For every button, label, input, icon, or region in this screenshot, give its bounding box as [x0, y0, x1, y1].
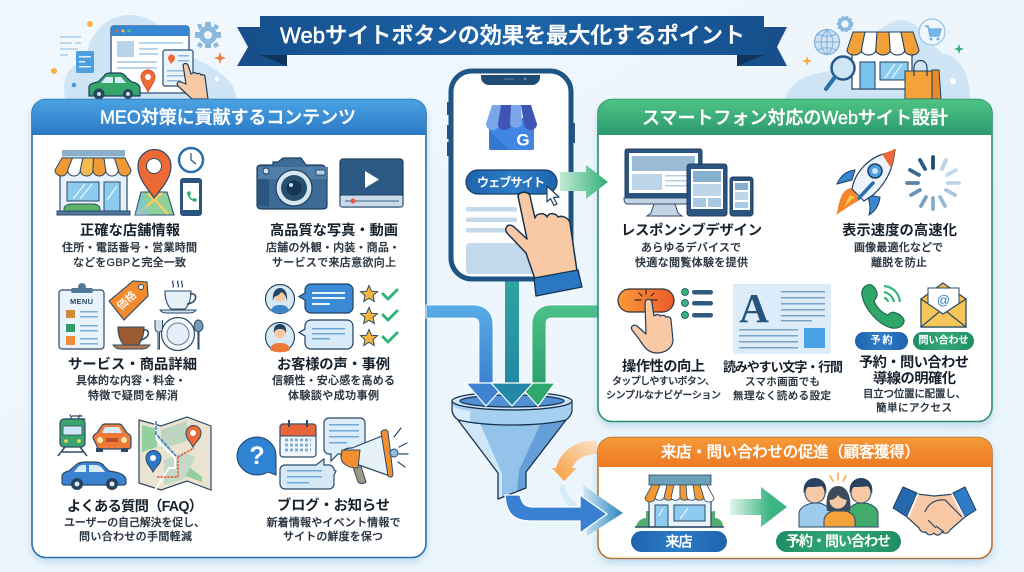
panel header: smartphone website design: スマートフォン対応のWebサイト設計	[642, 108, 948, 128]
item: service and product details: サービス・商品詳細	[68, 355, 197, 373]
icon: phone, mail, buttons	[855, 283, 974, 350]
item: high quality photo and video: 高品質な写真・動画	[270, 221, 398, 239]
icon: happy customers	[799, 473, 878, 527]
item: usability: タップしやすいボタン、	[612, 376, 715, 388]
item: responsive design: 快適な閲覧体験を提供	[635, 255, 748, 269]
item: page speed	[836, 149, 959, 269]
item: clear reservation and contact path	[855, 283, 974, 414]
icon: store, pin, clock, phone	[55, 148, 203, 216]
item: responsive design: あらゆるデバイスで	[641, 240, 741, 254]
panel header: visit and inquiry promotion	[598, 438, 992, 467]
arrow: from phone to funnel	[491, 281, 533, 406]
item: readable text: 無理なく読める設定	[733, 389, 832, 402]
icon: phone, mail, buttons: 問い合わせ	[918, 334, 968, 346]
illustration: web page, car, map pin and hand	[51, 15, 236, 99]
icon: readable document: A	[739, 285, 769, 331]
icon: reviews, stars and check marks	[266, 284, 397, 352]
arrow: from smartphone panel to funnel	[517, 305, 598, 406]
item: responsive design	[621, 149, 762, 269]
item: customer voices: お客様の声・事例	[277, 355, 390, 373]
pill: reservation and inquiry: 予約・問い合わせ	[786, 533, 891, 549]
icon: menu clipboard, price tag, cups, cutlery	[59, 281, 203, 350]
arrow: visit to inquiry	[730, 487, 787, 527]
icon: phone, mail, buttons: @	[937, 292, 950, 308]
item: blog and news: 新着情報やイベント情報で	[266, 515, 400, 529]
panel: MEO content	[32, 100, 426, 558]
item: blog and news: サイトの鮮度を保つ	[283, 529, 383, 543]
panel header: visit and inquiry promotion: 来店・問い合わせの促進（顧客獲得）	[661, 442, 920, 461]
icon: menu clipboard, price tag, cups, cutlery: MENU	[70, 297, 93, 306]
item: accurate store info: 住所・電話番号・営業時間	[62, 240, 197, 254]
panel: visit and inquiry promotion	[598, 438, 992, 558]
icon: question bubble, calendar, messages, megaphone	[237, 418, 408, 489]
item: accurate store info: 正確な店舗情報	[80, 221, 181, 239]
icon: menu clipboard, price tag, cups, cutlery: 価格	[113, 288, 139, 313]
item: FAQ	[58, 415, 211, 543]
item: FAQ: ユーザーの自己解決を促し、	[64, 515, 205, 529]
item: service and product details	[59, 281, 203, 402]
arrow: orange feedback loop	[552, 441, 597, 515]
icon: train, cars and route map	[58, 415, 211, 490]
item: high quality photo and video	[257, 158, 403, 269]
funnel rim and opening	[452, 392, 572, 410]
illustration: shop with shopping bag and magnifier	[785, 16, 970, 99]
item: customer voices	[266, 284, 397, 402]
arrow: from MEO panel to funnel	[426, 305, 507, 406]
item: customer voices: 体験談や成功事例	[288, 388, 379, 402]
icon: phone, mail, buttons: 予約	[870, 334, 892, 346]
pill: visit: 来店	[666, 534, 692, 550]
icon: funnel body	[452, 401, 572, 499]
icon: question bubble, calendar, messages, megaphone: ?	[249, 442, 265, 470]
item: FAQ: よくある質問（FAQ）	[67, 498, 203, 515]
website button: ウェブサイト	[477, 174, 545, 190]
item: usability: シンプルなナビゲーション	[606, 388, 721, 402]
item: usability: 操作性の向上	[622, 357, 705, 375]
item: readable text	[723, 284, 843, 402]
item: page speed: 離脱を防止	[871, 255, 927, 269]
item: readable text: 読みやすい文字・行間	[723, 360, 843, 374]
item: blog and news	[237, 418, 408, 543]
item: page speed: 画像最適化などで	[854, 240, 943, 254]
arrow: phone to smartphone panel	[560, 165, 608, 199]
pill: reservation and inquiry	[776, 531, 901, 552]
item: clear reservation and contact path: 予約・問い合わせ	[859, 354, 969, 371]
website button	[466, 170, 557, 194]
item: accurate store info: などをGBPと完全一致	[73, 255, 186, 269]
pill: visit	[631, 531, 727, 552]
panel header: MEO content: MEO対策に貢献するコンテンツ	[100, 108, 356, 128]
icon: Google business profile: G	[516, 130, 530, 150]
icon: handshake	[893, 487, 976, 535]
panel: smartphone website design	[598, 100, 992, 422]
item: clear reservation and contact path: 導線の明確化	[873, 369, 956, 387]
item: service and product details: 特徴で疑問を解消	[88, 388, 178, 402]
icon: store	[635, 475, 724, 527]
item: page speed: 表示速度の高速化	[842, 221, 957, 239]
item: high quality photo and video: 店舗の外観・内装・商品・	[266, 240, 400, 254]
item: high quality photo and video: サービスで来店意欲向上	[272, 255, 396, 269]
item: blog and news: ブログ・お知らせ	[277, 496, 390, 514]
item: service and product details: 具体的な内容・料金・	[76, 373, 186, 387]
icon: tapping hand and cursor	[506, 186, 582, 296]
icon: rocket and loading spinner	[836, 149, 959, 215]
arrow: funnel output to conversion panel	[505, 485, 623, 536]
item: customer voices: 信頼性・安心感を高める	[272, 373, 395, 387]
panel header: MEO content	[32, 100, 426, 135]
title ribbon	[237, 16, 787, 66]
icon: camera and video player	[257, 158, 403, 209]
item: usability	[606, 288, 721, 402]
icon: Google business profile	[486, 105, 537, 150]
icon: button with tapping hand and list	[618, 288, 713, 353]
item: readable text: スマホ画面でも	[745, 376, 820, 388]
item: accurate store info	[55, 148, 203, 269]
item: clear reservation and contact path: 目立つ位置に配置し、	[863, 387, 966, 400]
panel header: smartphone website design	[598, 100, 992, 135]
phone with Google business profile and website button	[448, 71, 574, 279]
item: responsive design: レスポンシブデザイン	[621, 221, 762, 239]
icon: desktop, tablet, phone	[624, 149, 753, 216]
title ribbon: Webサイトボタンの効果を最大化するポイント	[280, 23, 745, 48]
item: clear reservation and contact path: 簡単にアクセス	[876, 401, 952, 414]
item: FAQ: 問い合わせの手間軽減	[79, 529, 192, 543]
